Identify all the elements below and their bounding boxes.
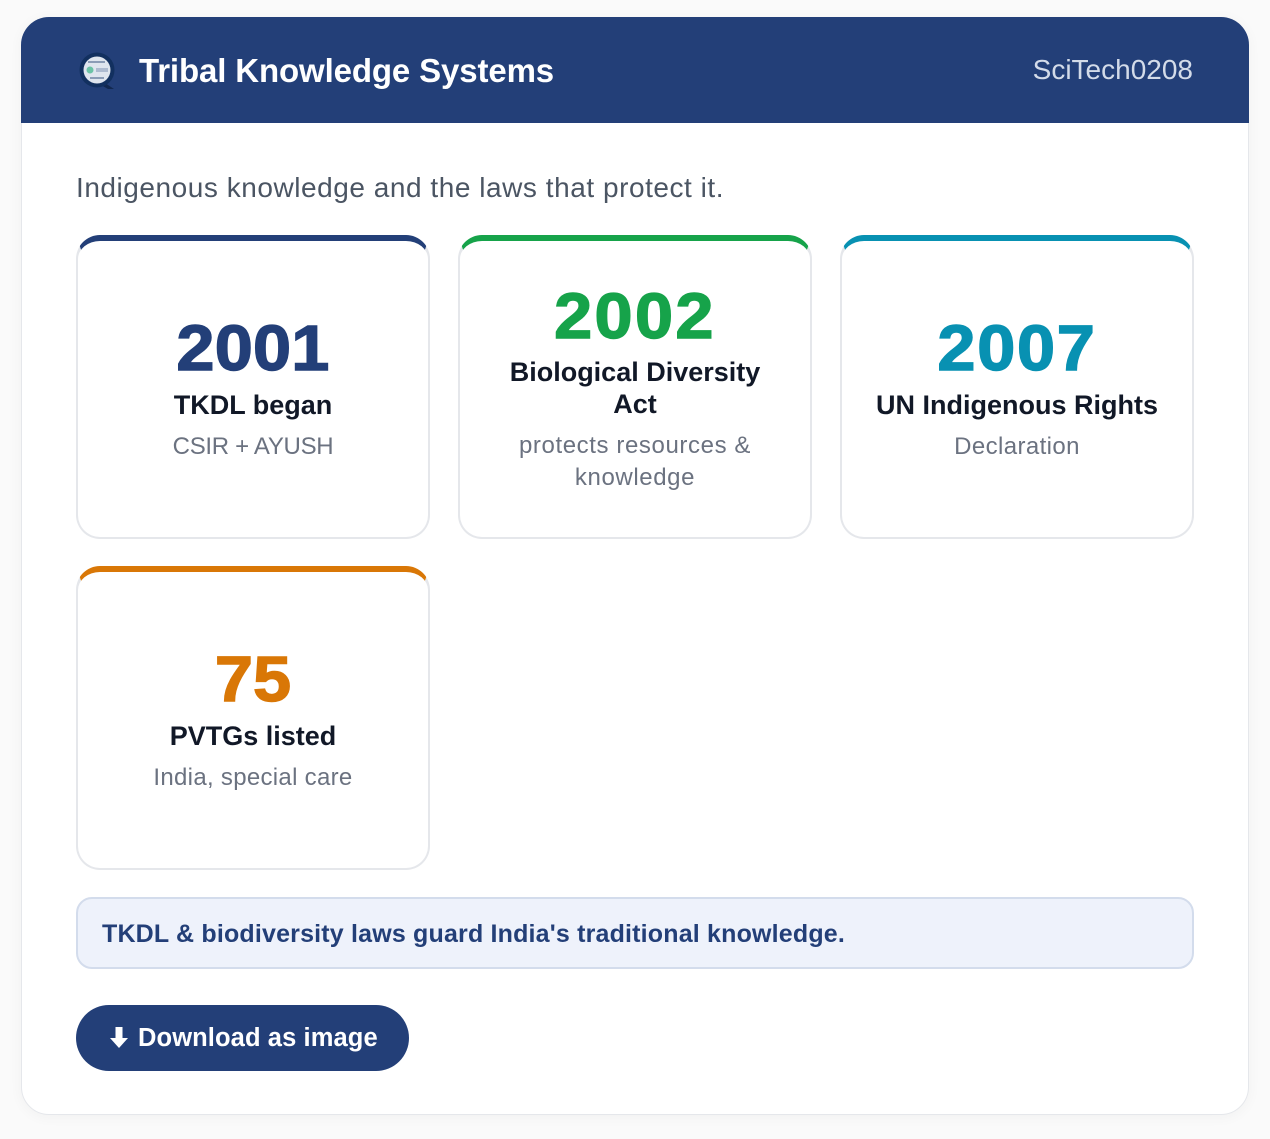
- header band: [21, 17, 1249, 123]
- callout text: TKDL & biodiversity laws guard India's traditional knowledge.: [102, 920, 845, 948]
- panel: 2007 UN Indigenous Rights: [840, 235, 1194, 539]
- title: Tribal Knowledge Systems: [139, 52, 554, 89]
- label: TKDL began: [174, 390, 332, 420]
- sublabel: CSIR + AYUSH: [173, 433, 333, 460]
- number: 2001: [176, 312, 330, 384]
- icon: down arrow: [110, 1027, 128, 1048]
- download button: [76, 1005, 409, 1071]
- sublabel: India, special care: [153, 764, 353, 791]
- number: 75: [215, 643, 291, 715]
- sublabel: [519, 432, 751, 491]
- callout: [76, 897, 1194, 969]
- icon: logo badge: [80, 52, 114, 89]
- panel: 75 PVTGs: [76, 566, 430, 870]
- label: [510, 357, 760, 419]
- subtitle: Indigenous knowledge and the laws that protect it.: [76, 172, 724, 203]
- label: Act: [613, 389, 657, 419]
- sublabel: Declaration: [954, 433, 1080, 460]
- sublabel: protects resources &: [519, 432, 751, 459]
- code label: SciTech0208: [1033, 54, 1193, 85]
- number: 2002: [554, 280, 716, 352]
- label: UN Indigenous Rights: [876, 390, 1158, 420]
- panel: 2001 TKDL: [76, 235, 430, 539]
- label: PVTGs listed: [170, 720, 336, 750]
- label: Biological Diversity: [510, 357, 760, 387]
- button label: Download as image: [138, 1024, 378, 1052]
- number: 2007: [937, 312, 1097, 384]
- panel: 2002 Biological Diversity Act: [458, 235, 812, 539]
- sublabel: knowledge: [575, 464, 695, 491]
